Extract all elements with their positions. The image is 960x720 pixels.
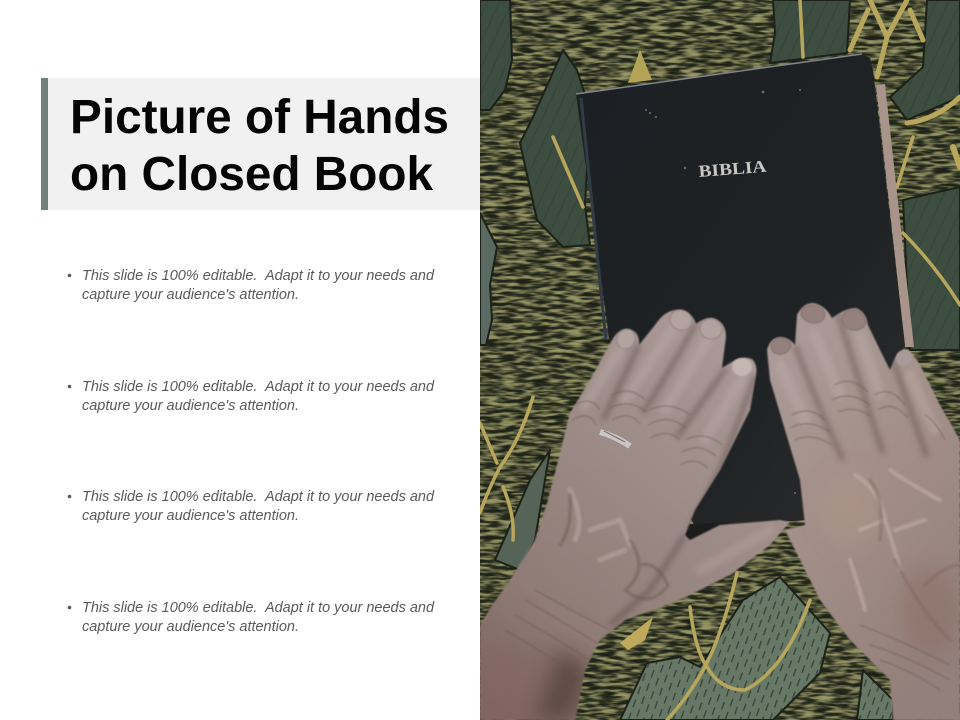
left hand shading (480, 324, 770, 720)
textile background (480, 0, 960, 720)
photo: hands on closed book (480, 0, 960, 720)
knuckles and veins (505, 391, 722, 680)
shadow beneath thumb (684, 522, 730, 540)
bullet text 2 (68, 379, 435, 414)
book pages edge (876, 84, 914, 347)
bullet text 4: This slide is 100% editable. Adapt it to your needs and (82, 600, 435, 616)
bullet text 3: This slide is 100% editable. Adapt it to your needs and (82, 489, 435, 505)
book title: BIBLIA (698, 157, 768, 181)
fingernails (614, 306, 752, 376)
pink back of hand (820, 470, 880, 550)
knuckles and veins (790, 381, 950, 690)
bullet text 1: This slide is 100% editable. Adapt it to your needs and (82, 268, 435, 284)
title panel (41, 78, 480, 210)
fingernails (769, 303, 912, 366)
bullet text 3: capture your audience's attention. (82, 508, 299, 524)
bullet text 2: capture your audience's attention. (82, 398, 299, 414)
bullet text 1 (68, 268, 435, 303)
ring (600, 431, 630, 446)
right hand shading (780, 314, 960, 690)
left hand (480, 306, 790, 720)
bullet list (68, 268, 435, 635)
bullet text 4: capture your audience's attention. (82, 619, 299, 635)
bullet text 1: capture your audience's attention. (82, 287, 299, 303)
bullet text 3 (68, 489, 435, 524)
right hand (767, 303, 960, 720)
bullet text 2: This slide is 100% editable. Adapt it to your needs and (82, 379, 435, 395)
title: on Closed Book (70, 148, 433, 201)
book cover (576, 54, 905, 527)
bullet text 4 (68, 600, 435, 635)
wrist tone (480, 667, 528, 720)
title: Picture of Hands (70, 91, 449, 144)
